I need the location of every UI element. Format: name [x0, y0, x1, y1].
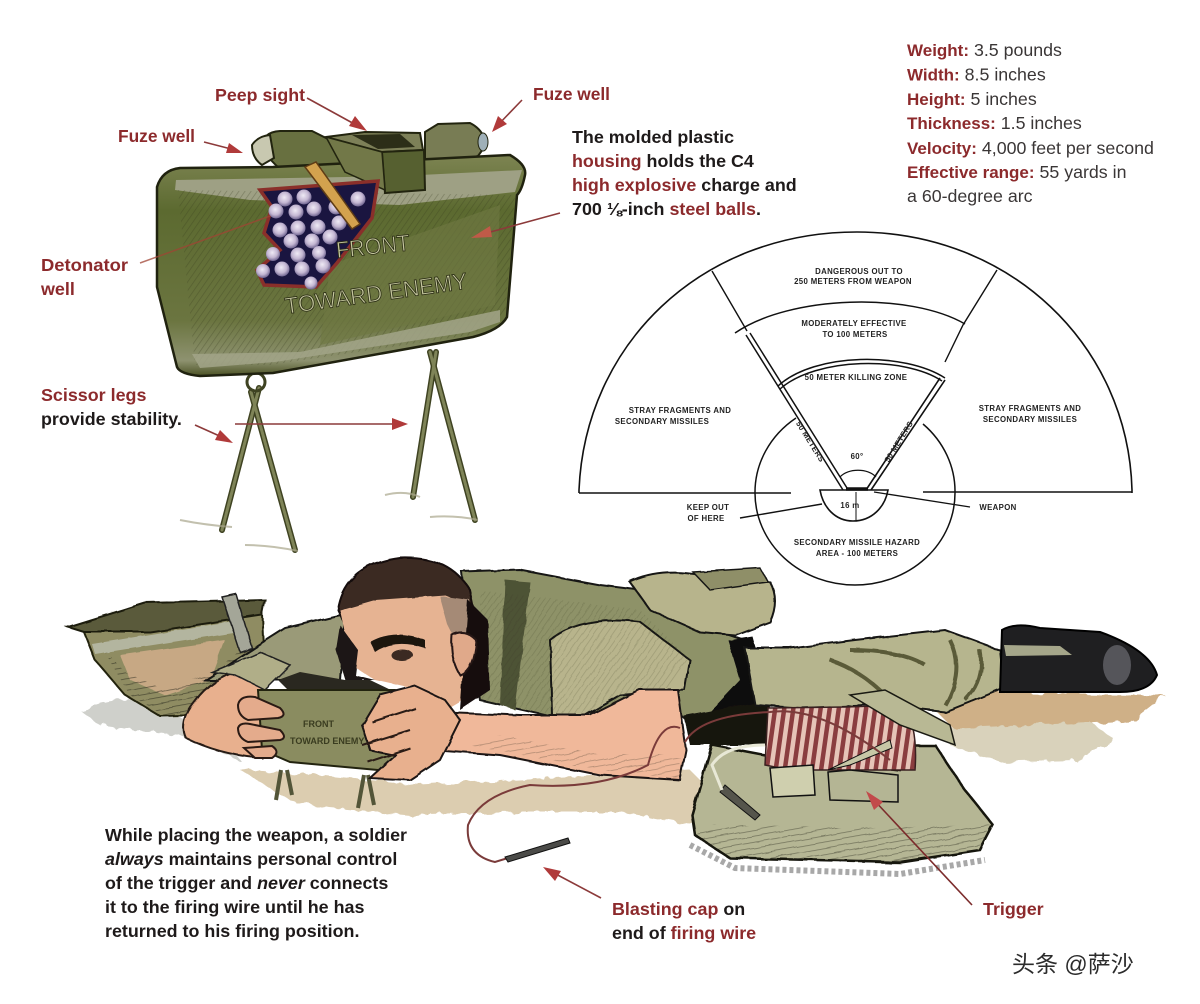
embossed words toward enemy: TOWARD ENEMY — [283, 268, 469, 319]
left upper arm — [205, 614, 345, 680]
embossed label: front toward enemy — [283, 229, 469, 319]
mini label front: FRONT — [303, 719, 334, 729]
torso uniform — [205, 568, 775, 745]
scissor legs: right — [413, 352, 475, 520]
pistol belt — [710, 636, 764, 720]
backpack roll — [630, 573, 775, 635]
mine top lip — [175, 170, 522, 205]
label: stray fragments right: STRAY FRAGMENTS AND — [979, 404, 1081, 413]
text: housing description: holds the C4 — [642, 151, 754, 171]
arrow: blasting cap — [543, 867, 601, 898]
label: moderately effective: MODERATELY EFFECTIVE — [801, 319, 907, 328]
right fuze well — [425, 123, 486, 172]
label: dangerous out to: DANGEROUS OUT TO — [815, 267, 903, 276]
helmet — [68, 594, 265, 716]
label: scissor legs: Scissor legs — [41, 385, 146, 405]
arrow: scissor leg right — [235, 418, 408, 430]
bag ground shadow — [690, 845, 985, 874]
killing zone edge: right double line — [866, 378, 945, 490]
caption: placing the weapon: of the trigger and — [105, 873, 257, 893]
right fuze thread — [478, 133, 488, 151]
spec: effective range: Effective range: 55 yards in — [907, 162, 1126, 182]
spec: height: Height: 5 inches — [907, 89, 1037, 109]
camo hatching — [480, 590, 690, 718]
embossed word front: FRONT — [335, 229, 411, 263]
mine right face highlight — [320, 205, 500, 345]
steel balls cluster — [256, 190, 366, 290]
miniature mine being placed — [258, 672, 418, 808]
boot toe cap — [1103, 645, 1131, 685]
arrow: peep sight — [307, 98, 367, 131]
label: to 100 meters: TO 100 METERS — [822, 330, 888, 339]
label: blasting cap: firing wire — [671, 923, 756, 943]
blasting cap — [505, 838, 570, 862]
left forearm and hand — [184, 652, 290, 758]
arrow: trigger — [866, 791, 972, 905]
right forearm — [430, 690, 686, 780]
helmet rim — [68, 600, 265, 632]
label: weapon: WEAPON — [979, 503, 1017, 512]
caption: placing the weapon: returned to his firing position. — [105, 921, 359, 941]
pack strap — [693, 568, 768, 590]
wire spool — [765, 690, 955, 770]
ground: left shadow — [82, 700, 240, 760]
label: fuze well left: Fuze well — [118, 126, 195, 146]
brow — [370, 634, 425, 652]
ground: right dirt tan — [930, 692, 1165, 735]
bag body — [692, 745, 993, 862]
label: secondary missile hazard: SECONDARY MISSILE HAZARD — [794, 538, 920, 547]
sixty degree angle arc — [840, 470, 876, 477]
arrow: fuze well left — [204, 142, 243, 153]
right arm and hand — [362, 686, 686, 780]
leg ground shadow — [180, 493, 478, 551]
left fuze well — [252, 131, 352, 190]
spec: velocity: Velocity: 4,000 feet per second — [907, 138, 1154, 158]
bag hatching — [695, 825, 990, 862]
arrow: detonator line — [140, 216, 270, 263]
moderately effective arc — [735, 302, 965, 333]
plug — [720, 785, 760, 820]
scissor legs: left — [222, 373, 295, 550]
sleeve — [550, 620, 690, 718]
left cuff — [212, 652, 290, 690]
label: detonator well: well — [40, 279, 75, 299]
bag — [692, 745, 993, 862]
killing zone arc — [778, 359, 945, 389]
weapon marker — [846, 487, 868, 491]
outer danger arc — [579, 232, 1132, 493]
label: 16 m: 16 m — [840, 501, 860, 510]
clacker block right — [828, 770, 898, 802]
label: 50 meters left: 50 METERS — [794, 420, 826, 464]
right fingers — [362, 708, 415, 762]
spool flap — [850, 690, 955, 745]
helmet tan patch — [120, 640, 225, 695]
leader: keep out — [740, 504, 822, 518]
boot — [1000, 625, 1157, 692]
ground under soldier — [82, 692, 1165, 874]
firing wire — [468, 727, 680, 862]
trousers — [745, 630, 1004, 712]
spec: weight: Weight: 3.5 pounds — [907, 40, 1062, 60]
leader: weapon — [874, 492, 970, 507]
label: detonator well: Detonator — [41, 255, 128, 275]
label: blasting cap: end of — [612, 923, 671, 943]
caption: placing the weapon: maintains personal control — [164, 849, 397, 869]
mine bottom highlight — [192, 310, 500, 368]
radius tick — [855, 492, 857, 520]
fuze well arm — [262, 131, 352, 190]
label: secondary missile hazard: AREA - 100 METERS — [816, 549, 898, 558]
peep sight — [326, 132, 425, 193]
ear — [452, 632, 476, 675]
label: keep out of here: KEEP OUT — [687, 503, 729, 512]
arrow: housing — [471, 213, 560, 238]
ground: right dirt pale — [945, 722, 1115, 762]
cutaway cavity — [257, 181, 378, 287]
danger sector dividers — [712, 270, 997, 362]
clacker handle — [828, 740, 892, 770]
left forearm — [184, 670, 265, 758]
spec: width: Width: 8.5 inches — [907, 64, 1046, 84]
mini mine fuzes — [278, 672, 395, 692]
label: trigger: Trigger — [983, 899, 1044, 919]
watermark: 头条 @萨沙 — [1012, 951, 1134, 977]
peep sight top — [326, 132, 423, 152]
ground: center dirt — [240, 770, 720, 825]
wire to spool — [685, 711, 890, 760]
text: housing description: housing — [572, 151, 642, 171]
arrow: fuze well right — [492, 100, 522, 132]
head — [336, 558, 490, 710]
helmet dome — [84, 603, 264, 716]
spec: arc: a 60-degree arc — [907, 186, 1033, 206]
text: housing description: 700 ⅛-inch — [572, 199, 669, 219]
mine hatching — [178, 190, 515, 365]
peep sight opening — [352, 134, 415, 149]
shaved side — [440, 596, 476, 645]
head hair — [338, 558, 478, 630]
label: stray fragments left: STRAY FRAGMENTS AND — [629, 406, 731, 415]
label: stray fragments right: SECONDARY MISSILES — [983, 415, 1077, 424]
mini mine legs — [276, 770, 374, 808]
helmet hatching — [100, 640, 250, 716]
caption: placing the weapon: it to the firing wire until he has — [105, 897, 364, 917]
mine body — [157, 155, 525, 376]
helmet strap — [222, 594, 252, 652]
helmet band — [92, 620, 243, 654]
label: 250 meters: 250 METERS FROM WEAPON — [794, 277, 912, 286]
vest strap — [500, 580, 530, 710]
illustration: soldier placing the mine — [68, 558, 1165, 874]
label: scissor legs: provide stability. — [41, 409, 182, 429]
label: blasting cap: Blasting cap — [612, 899, 718, 919]
neck shadow — [460, 600, 490, 710]
spec: thickness: Thickness: 1.5 inches — [907, 113, 1082, 133]
trigger clackers — [712, 740, 898, 820]
mini label toward enemy: TOWARD ENEMY — [290, 736, 364, 746]
caption: placing the weapon: While placing the weapon, a soldier — [105, 825, 407, 845]
left hand fingers — [238, 697, 284, 758]
mini mine body — [258, 690, 418, 772]
baseline right — [923, 491, 1132, 493]
arrow: scissor leg left — [195, 425, 233, 443]
peep sight front — [382, 150, 425, 193]
label: fuze well right: Fuze well — [533, 84, 610, 104]
spool wire windings — [765, 705, 916, 770]
peep sight side — [326, 137, 385, 190]
connector wire — [712, 745, 765, 790]
nose shadow — [336, 625, 375, 680]
shadow beneath torso — [684, 700, 772, 745]
killing zone edge: left double line — [746, 333, 847, 490]
label: killing zone: 50 METER KILLING ZONE — [805, 373, 907, 382]
right hand — [362, 686, 460, 780]
cutaway: steel balls — [256, 181, 378, 290]
baseline left — [579, 492, 791, 494]
caption: placing the weapon: never connects — [257, 873, 388, 893]
leg trousers — [745, 630, 1004, 712]
label: keep out of here: OF HERE — [687, 514, 725, 523]
blast zone diagram — [579, 232, 1132, 585]
clacker block left — [770, 765, 815, 797]
label: 60 degrees: 60° — [851, 452, 863, 461]
text: housing description: The molded plastic — [572, 127, 734, 147]
forearm hatching — [470, 735, 680, 778]
label: blasting cap: on — [718, 899, 745, 919]
text: housing description: steel balls. — [669, 199, 761, 219]
trouser folds — [830, 640, 981, 705]
text: housing description: charge and — [696, 175, 797, 195]
shoulder and back — [462, 570, 760, 730]
keep out semicircle — [820, 490, 888, 521]
specifications text block — [907, 40, 1154, 206]
boot body — [1000, 625, 1157, 692]
eye — [391, 649, 413, 661]
secondary missile hazard circle — [755, 418, 955, 585]
detonator well tube — [305, 162, 360, 229]
label: peep sight: Peep sight — [215, 85, 305, 105]
caption: placing the weapon: always — [105, 849, 164, 869]
boot lace strip — [1004, 645, 1072, 656]
blast zone labels — [615, 267, 1081, 558]
label: 50 meters right: 50 METERS — [883, 420, 915, 464]
label: stray fragments left: SECONDARY MISSILES — [615, 417, 709, 426]
face — [340, 595, 470, 710]
text: housing description: high explosive — [572, 175, 696, 195]
fuze thread — [252, 135, 274, 165]
callout labels for the mine — [40, 84, 797, 443]
illustration: claymore mine — [157, 123, 525, 551]
